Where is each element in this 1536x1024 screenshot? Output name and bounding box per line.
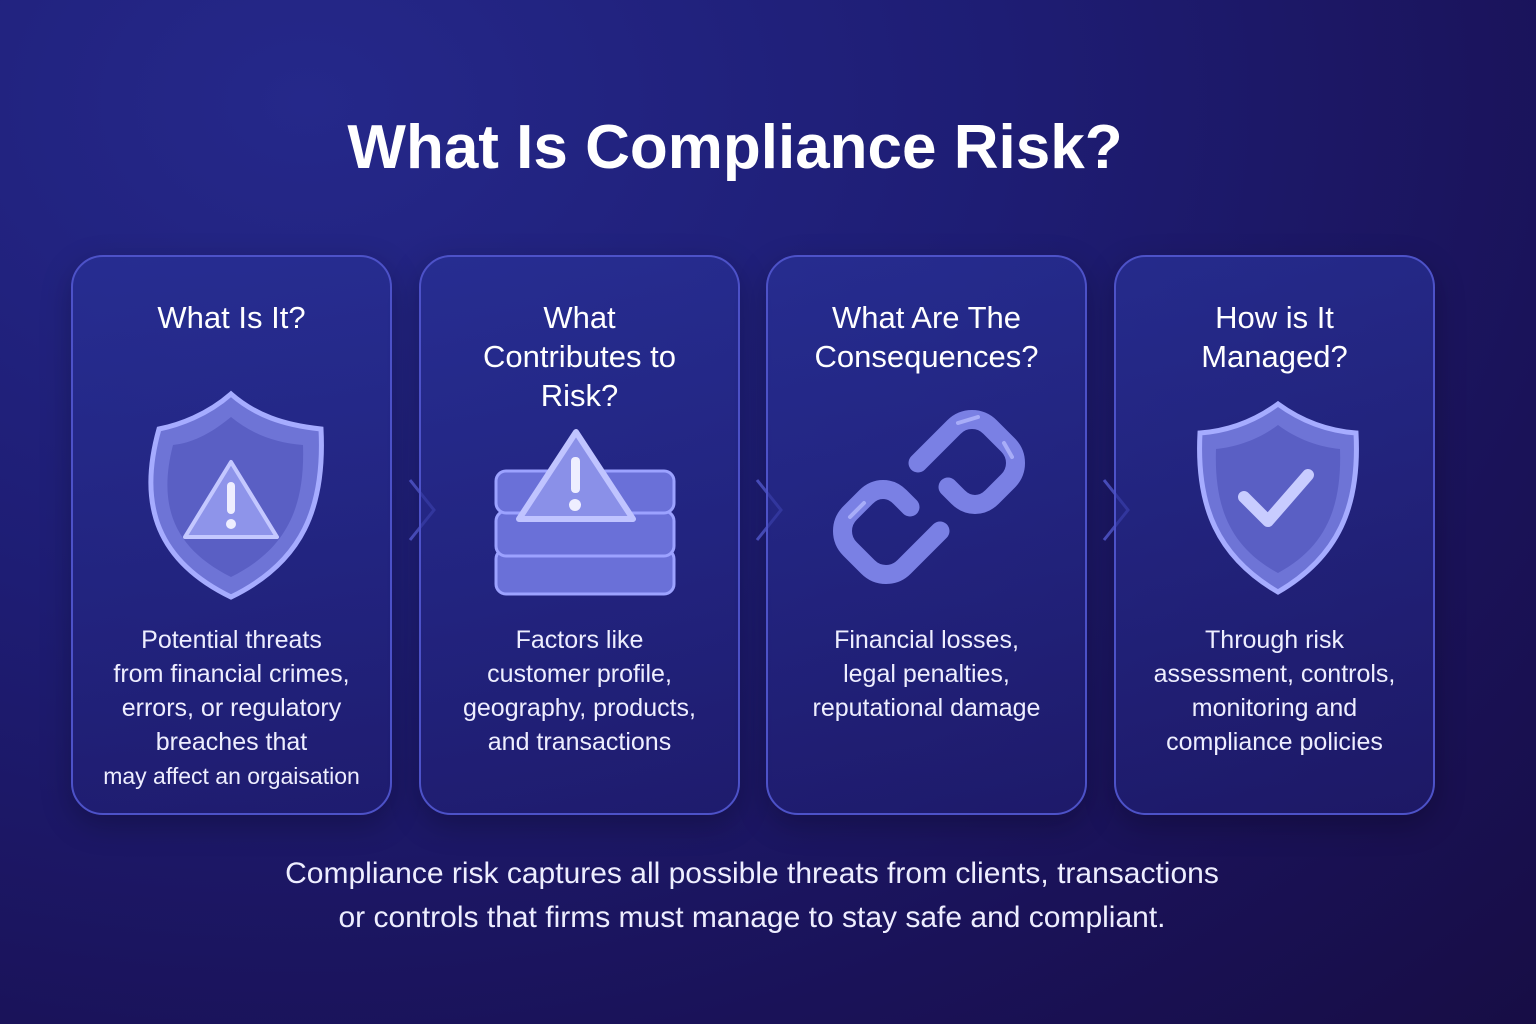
text: legal penalties, — [843, 660, 1010, 688]
icon: shield warning — [148, 390, 324, 600]
text — [463, 626, 696, 756]
heading: Consequences? — [814, 339, 1039, 374]
heading: What Are The — [832, 300, 1021, 335]
heading: What Is It? — [157, 300, 306, 335]
icon: shield check — [1197, 401, 1359, 595]
arrow — [756, 479, 783, 541]
text: and transactions — [488, 728, 671, 756]
text: breaches that — [156, 728, 307, 756]
footer text: Compliance risk captures all possible threats from clients, transactions — [285, 857, 1219, 890]
text: Potential threats — [141, 626, 322, 654]
panel: contributes — [419, 255, 740, 815]
footer text: or controls that firms must manage to stay safe and compliant. — [338, 901, 1166, 934]
panel: consequences — [766, 255, 1087, 815]
text: customer profile, — [487, 660, 672, 688]
heading: Managed? — [1201, 339, 1348, 374]
panel: managed — [1114, 255, 1435, 815]
text: monitoring and — [1192, 694, 1357, 722]
text — [103, 626, 360, 789]
arrow — [409, 479, 436, 541]
text: Factors like — [516, 626, 643, 654]
panel: what is it — [71, 255, 392, 815]
text — [1154, 626, 1395, 756]
text: compliance policies — [1166, 728, 1383, 756]
title: What Is Compliance Risk? — [347, 113, 1123, 182]
heading: Contributes to — [483, 339, 676, 374]
heading — [814, 300, 1039, 374]
text: may affect an orgaisation — [103, 763, 360, 789]
arrow — [1102, 479, 1130, 541]
heading: What — [543, 300, 616, 335]
text: Through risk — [1205, 626, 1344, 654]
heading: Risk? — [541, 378, 618, 413]
text: reputational damage — [813, 694, 1040, 722]
text: from financial crimes, — [113, 660, 350, 688]
icon: stacked layers warning — [494, 429, 676, 596]
heading: How is It — [1215, 300, 1334, 335]
text: errors, or regulatory — [122, 694, 341, 722]
text: geography, products, — [463, 694, 696, 722]
footer text — [285, 857, 1219, 934]
text: assessment, controls, — [1154, 660, 1395, 688]
icon: broken chain — [833, 410, 1025, 584]
text: Financial losses, — [834, 626, 1019, 654]
heading — [483, 300, 676, 413]
heading — [1201, 300, 1348, 374]
text — [813, 626, 1040, 722]
